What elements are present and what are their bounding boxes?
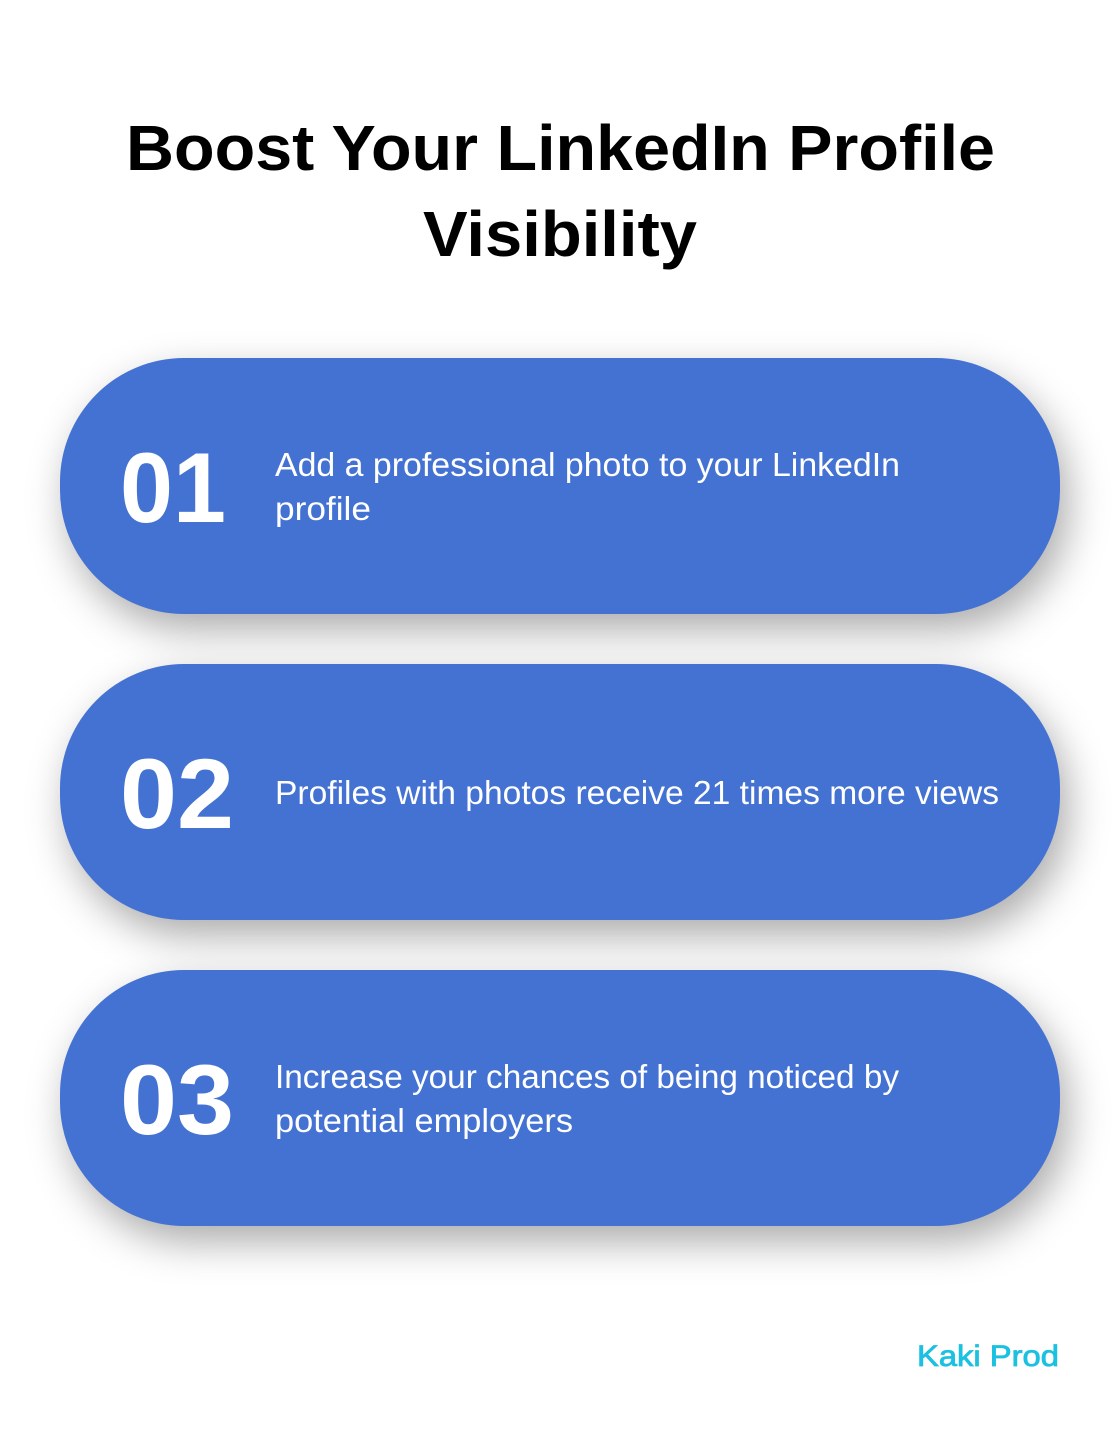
text: step 03: Increase your chances of being noticed by [275,1058,900,1095]
text: step 01: Add a professional photo to your LinkedIn [275,446,900,483]
text: step 03: potential employers [275,1102,573,1139]
title [126,112,995,270]
title: Boost Your LinkedIn Profile [126,112,995,184]
text: step 01: profile [275,490,371,527]
logo: Kaki Prod: Kaki Prod [917,1340,1059,1373]
panel: step 02 [60,664,1068,936]
text: step 02: Profiles with photos receive 21 times more views [275,774,999,811]
panel: step 03 [60,970,1068,1242]
panel: step 01 [60,358,1068,630]
number 01: 01 [120,432,226,543]
number 02: 02 [120,738,234,849]
title: Visibility [423,198,697,270]
number 03: 03 [120,1044,234,1155]
text: step 01 [275,446,900,527]
text: step 03 [275,1058,900,1139]
